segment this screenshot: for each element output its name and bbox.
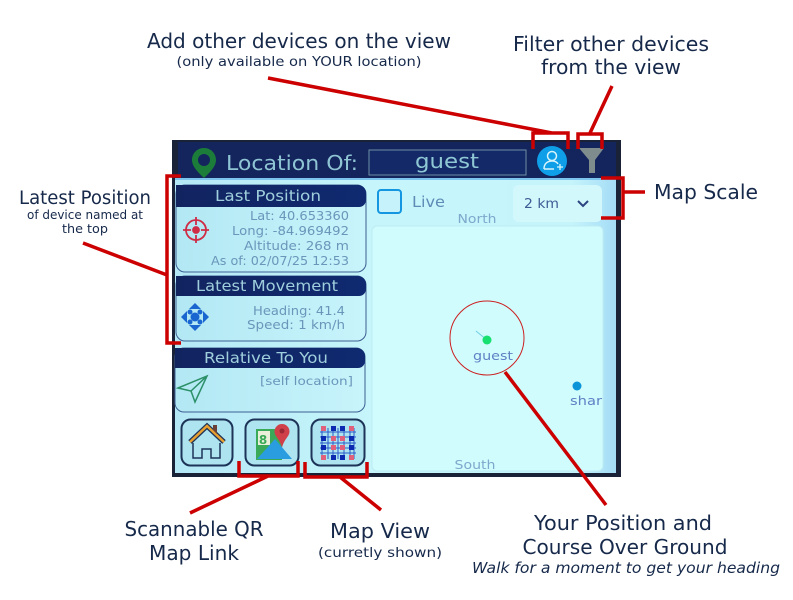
label: north: North	[458, 212, 496, 226]
callout: filter devices: Filter other devices	[513, 32, 709, 56]
device name field	[369, 149, 526, 175]
device screen	[172, 140, 621, 477]
position readout: As of: 02/07/25 12:53	[211, 254, 349, 268]
callout: latest position: of device named at	[27, 207, 143, 222]
callout: add other devices	[147, 29, 568, 149]
callout: add other devices: (only available on YOUR location)	[176, 54, 422, 70]
heading: Location Of: Location Of:	[226, 151, 358, 175]
heading: last position: Last Position	[215, 187, 321, 205]
icon: green location pin	[192, 148, 216, 178]
callout: scannable QR map link	[124, 461, 298, 565]
callout: latest position	[19, 176, 181, 343]
marker: guest: guest	[473, 349, 513, 363]
heading: relative to you: Relative To You	[204, 349, 328, 367]
panel: relative to you	[175, 348, 365, 412]
icon: crosshair target	[183, 217, 209, 243]
relative readout: [self location]	[260, 374, 353, 388]
checkbox: live	[378, 190, 445, 213]
callout: map view: (curretly shown)	[318, 545, 442, 561]
dropdown: map scale	[513, 185, 602, 222]
button: map view grid	[312, 420, 364, 466]
callout: add other devices: Add other devices on the view	[147, 29, 451, 53]
marker: guest	[473, 331, 513, 363]
marker: shared device: shar	[570, 394, 602, 408]
movement readout: Speed: 1 km/h	[247, 318, 345, 332]
callout: map scale	[601, 178, 758, 218]
callout: filter devices	[513, 32, 709, 149]
dropdown: map scale: 2 km	[524, 197, 559, 212]
panel: last position	[176, 185, 366, 272]
checkbox: live: Live	[412, 193, 445, 211]
callout: your position and course: Your Position and	[533, 511, 712, 535]
label: south: South	[454, 458, 496, 472]
callout: scannable QR map link: Map Link	[149, 541, 239, 565]
position readout	[211, 209, 349, 268]
callout: map scale: Map Scale	[654, 180, 758, 204]
button: home	[182, 420, 232, 466]
screen header bar	[175, 142, 616, 180]
position readout: Altitude: 268 m	[244, 239, 349, 253]
callout: your position and course: Walk for a moment to get your heading	[472, 559, 780, 577]
callout: filter devices: from the view	[541, 55, 681, 79]
callout: map view: Map View	[330, 519, 430, 543]
movement readout: Heading: 41.4	[253, 304, 345, 318]
movement readout	[247, 304, 345, 332]
button: map link	[246, 420, 298, 466]
position readout: Lat: 40.653360	[250, 209, 349, 223]
callout: your position and course: Course Over Ground	[522, 535, 728, 559]
callout: latest position: the top	[62, 221, 108, 236]
callout: latest position: Latest Position	[19, 188, 151, 209]
callout: your position and course	[450, 301, 780, 577]
position readout: Long: -84.969492	[232, 224, 349, 238]
icon: filter funnel	[579, 148, 604, 173]
callout: scannable QR map link: Scannable QR	[124, 517, 264, 541]
panel: latest movement	[176, 276, 366, 341]
icon: add device	[537, 146, 567, 176]
button: map link: 8	[259, 433, 267, 447]
heading: latest movement: Latest Movement	[196, 277, 338, 295]
device name field: guest	[415, 149, 479, 173]
icon: four-way arrows	[181, 303, 209, 331]
callout: map view	[305, 462, 442, 561]
icon: paper plane	[178, 376, 207, 402]
marker: shared device	[570, 382, 602, 408]
map area	[372, 212, 603, 472]
